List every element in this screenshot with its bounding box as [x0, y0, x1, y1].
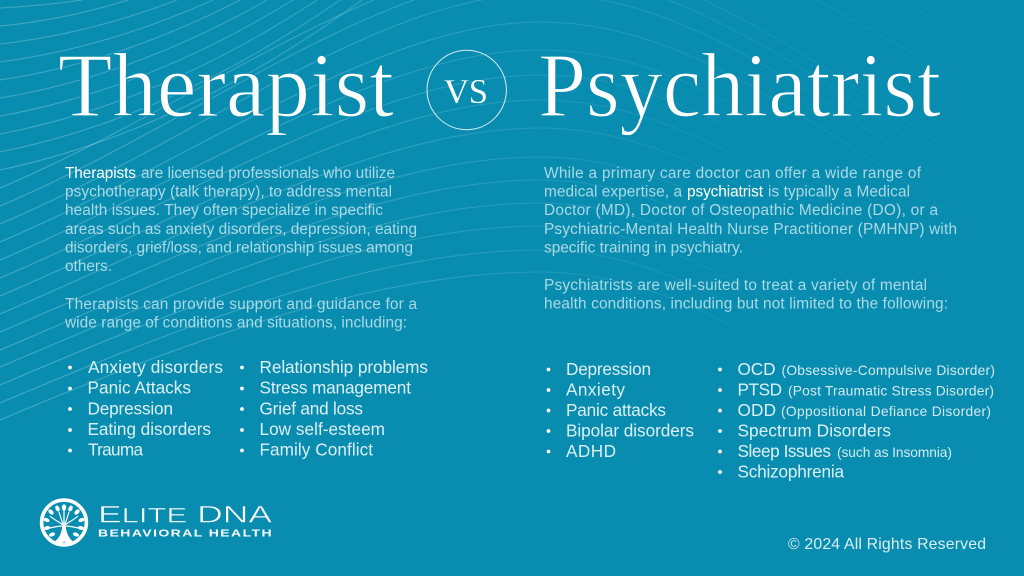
vs badge: vs: [444, 58, 488, 114]
list: therapist conditions column 1: Panic Attacks: [88, 378, 191, 398]
panel: therapist description: disorders, grief/loss, and relationship issues among: [65, 239, 413, 256]
panel: therapist description: are licensed professionals who utilize: [141, 165, 395, 182]
logo: Elite DNA Behavioral Health: [42, 500, 273, 546]
list: psychiatrist conditions column 2: Schizophrenia: [738, 462, 844, 482]
list: psychiatrist conditions column 1: Bipolar disorders: [566, 420, 694, 440]
list: psychiatrist conditions column 1: [547, 359, 694, 461]
panel: therapist description: health issues. They often specialize in specific: [65, 202, 383, 219]
panel: psychiatrist description: Doctor (MD), Doctor of Osteopathic Medicine (DO), or a: [544, 202, 938, 219]
list: therapist conditions column 1: Trauma: [88, 440, 143, 460]
list: psychiatrist conditions column 1: Anxiety: [566, 380, 625, 400]
vs badge: [427, 50, 506, 130]
list: therapist conditions column 2: Stress management: [260, 378, 411, 398]
list: psychiatrist conditions column 2: (such as Insomnia): [837, 445, 952, 460]
list: psychiatrist conditions column 2: (Obsessive-Compulsive Disorder): [782, 363, 995, 378]
list: therapist conditions column 1: Anxiety disorders: [88, 357, 223, 377]
list: psychiatrist conditions column 1: Depression: [566, 359, 651, 379]
icon: tree in circle: [42, 500, 86, 546]
title: Psychiatrist: Psychiatrist: [538, 35, 941, 136]
list: psychiatrist conditions column 1: Panic attacks: [566, 400, 666, 420]
list: therapist conditions column 2: Relationship problems: [260, 357, 428, 377]
panel: therapist description: wide range of conditions and situations, including:: [64, 314, 407, 332]
title: Therapist: Therapist: [58, 35, 394, 136]
list: psychiatrist conditions column 2: (Oppositional Defiance Disorder): [781, 404, 991, 419]
panel: psychiatrist description: specific training in psychiatry.: [544, 239, 743, 256]
list: psychiatrist conditions column 2: PTSD: [738, 380, 782, 400]
list: therapist conditions column 2: Grief and loss: [260, 398, 363, 418]
list: therapist conditions column 2: Family Conflict: [260, 440, 373, 460]
logo wordmark: E LITE DNA: [98, 502, 272, 529]
panel: therapist description: Therapists: [65, 165, 136, 182]
logo tagline: BEHAVIORAL HEALTH: [98, 529, 273, 540]
list: psychiatrist conditions column 1: ADHD: [566, 441, 616, 461]
panel: therapist description: areas such as anxiety disorders, depression, eating: [65, 221, 417, 238]
panel: psychiatrist description: is typically a Medical: [768, 184, 910, 201]
list: psychiatrist conditions column 2: (Post Traumatic Stress Disorder): [788, 384, 994, 398]
list: therapist conditions column 2: Low self-esteem: [260, 419, 385, 439]
panel: psychiatrist description: Psychiatrists are well-suited to treat a variety of mental: [544, 277, 927, 294]
panel: psychiatrist description: medical expertise, a: [544, 184, 682, 201]
list: therapist conditions column 2: [240, 357, 428, 460]
list: psychiatrist conditions column 2: Spectrum Disorders: [738, 420, 891, 440]
panel: therapist description: [64, 165, 417, 332]
list: therapist conditions column 1: [68, 357, 223, 460]
list: psychiatrist conditions column 2: OCD: [738, 359, 776, 379]
copyright: © 2024 All Rights Reserved: [788, 536, 986, 553]
panel: psychiatrist description: [544, 165, 957, 312]
panel: psychiatrist description: While a primary care doctor can offer a wide range of: [544, 165, 922, 182]
panel: therapist description: psychotherapy (talk therapy), to address mental: [65, 184, 392, 201]
list: therapist conditions column 1: Depression: [88, 398, 173, 418]
panel: therapist description: Therapists can provide support and guidance for a: [65, 296, 417, 313]
list: psychiatrist conditions column 2: [718, 359, 995, 482]
list: therapist conditions column 1: Eating disorders: [88, 419, 211, 439]
panel: psychiatrist description: Psychiatric-Mental Health Nurse Practitioner (PMHNP) with: [544, 221, 957, 238]
list: psychiatrist conditions column 2: ODD: [738, 400, 776, 420]
panel: psychiatrist description: health conditions, including but not limited to the following:: [544, 296, 948, 312]
panel: psychiatrist description: psychiatrist: [687, 184, 764, 201]
list: psychiatrist conditions column 2: Sleep Issues: [738, 441, 831, 461]
panel: therapist description: others.: [65, 258, 112, 275]
